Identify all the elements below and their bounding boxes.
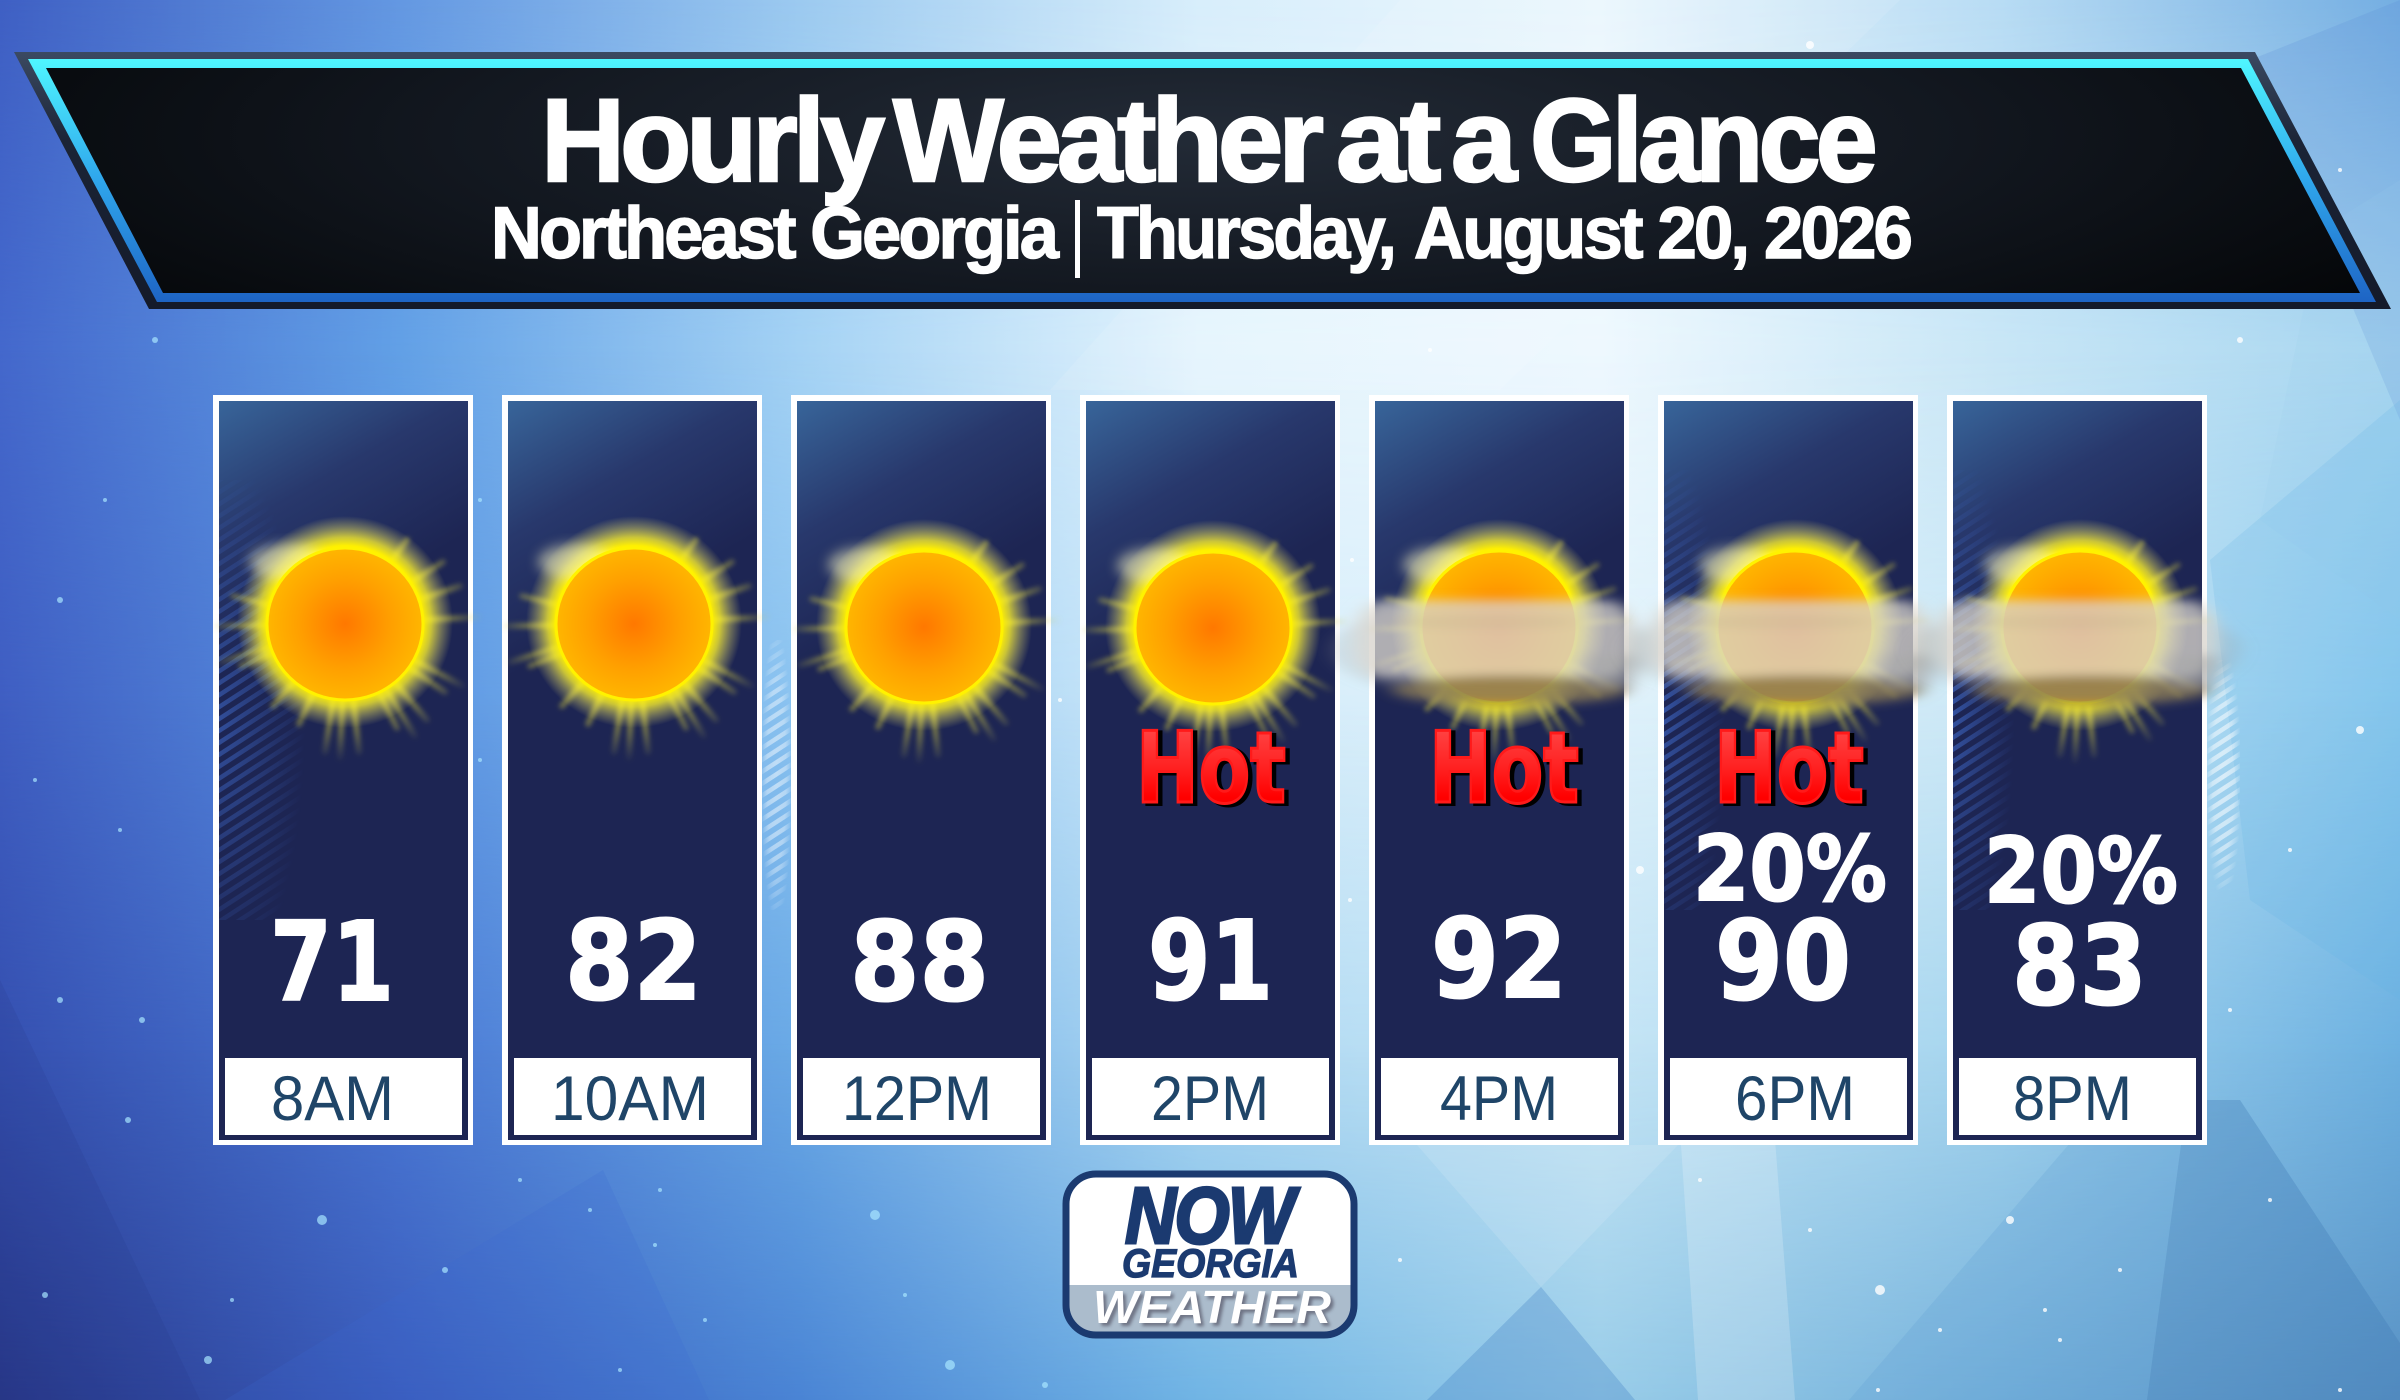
title: Weather [893, 75, 1323, 207]
time label [1959, 1058, 2196, 1135]
subtitle: August 20, 2026 [1414, 193, 1910, 274]
temperature: 83 [2012, 902, 2147, 1030]
logo word: NOW: NOW [1125, 1171, 1301, 1260]
time label: 8PM [2013, 1064, 2132, 1134]
time label: 6PM [1735, 1064, 1855, 1134]
time label [803, 1058, 1040, 1135]
temperature: 82 [565, 897, 702, 1025]
title banner [14, 52, 2391, 309]
icon: sun [217, 516, 479, 760]
time label: 2PM [1151, 1064, 1269, 1134]
time label [514, 1058, 751, 1135]
temperature: 91 [1148, 897, 1273, 1025]
title: Glance [1530, 75, 1874, 207]
icon: cloud 6PM [1626, 600, 1956, 705]
hot label: Hot [1714, 712, 1864, 826]
icon: sun [1952, 519, 2214, 763]
subtitle [491, 193, 1910, 278]
logo word: WEATHER: WEATHER [1096, 1284, 1334, 1336]
logo word: GEORGIA: GEORGIA [1122, 1242, 1299, 1286]
subtitle: Thursday, [1097, 193, 1394, 274]
hot label: Hot [1140, 714, 1290, 828]
hot label: Hot [1718, 714, 1868, 828]
icon: cloud 4PM [1330, 600, 1660, 705]
hot label: Hot [1136, 712, 1286, 826]
rain chance: 20% [1984, 819, 2178, 924]
temperature: 92 [1431, 895, 1567, 1023]
icon: sun [1085, 520, 1347, 764]
logo word: WEATHER: WEATHER [1093, 1281, 1331, 1333]
rain chance: 20% [1693, 817, 1887, 922]
panel: 10AM [502, 395, 768, 1145]
temperature: 71 [270, 898, 394, 1026]
panel: 8AM [213, 395, 479, 1145]
icon: sun [1667, 519, 1929, 763]
title [541, 75, 1874, 207]
panel: 2PM [1080, 395, 1347, 1145]
icon: sun [1371, 519, 1633, 763]
panel: 6PM [1658, 395, 1929, 1145]
time label [1381, 1058, 1618, 1135]
title: a [1451, 75, 1518, 207]
temperature: 88 [850, 898, 989, 1026]
panel: 4PM [1369, 395, 1633, 1145]
time label [1670, 1058, 1907, 1135]
time label: 12PM [842, 1064, 992, 1134]
subtitle: Northeast Georgia [491, 193, 1060, 274]
temperature: 90 [1715, 897, 1851, 1025]
icon: cloud 8PM [1912, 600, 2242, 705]
hot label: Hot [1429, 712, 1579, 826]
icon: sun [796, 519, 1058, 763]
hot label: Hot [1433, 714, 1583, 828]
time label: 8AM [271, 1064, 394, 1134]
time label: 10AM [551, 1064, 709, 1134]
panel: 12PM [791, 395, 1058, 1145]
time label [225, 1058, 462, 1135]
panel: 8PM [1947, 395, 2214, 1145]
time label: 4PM [1440, 1064, 1558, 1134]
title: at [1336, 75, 1440, 207]
logo: Now Georgia Weather [1066, 1171, 1354, 1336]
icon: sun [506, 516, 768, 760]
title: Hourly [541, 75, 884, 207]
time label [1092, 1058, 1329, 1135]
